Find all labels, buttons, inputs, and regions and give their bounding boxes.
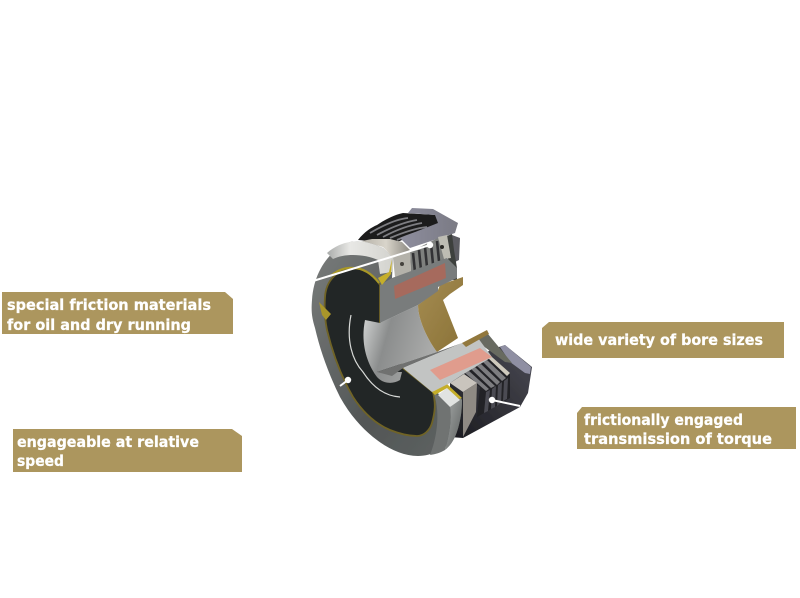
lower gray wedge bbox=[475, 334, 512, 363]
small block top right bbox=[438, 235, 451, 259]
lower light section bbox=[403, 338, 492, 392]
upper casing dark bellows bbox=[358, 213, 440, 243]
bore bbox=[363, 305, 437, 383]
illustration: cutaway clutch bbox=[312, 208, 532, 456]
yellow ring highlight bbox=[332, 268, 379, 283]
upper brown friction lining bbox=[394, 263, 446, 299]
callout: wide variety of bore sizes bbox=[542, 322, 784, 358]
armature plate bbox=[447, 234, 457, 280]
leader line: frictionally engaged bbox=[489, 397, 520, 406]
lower rim inner band bbox=[430, 394, 451, 455]
callout: frictionally engaged transmission of torque bbox=[577, 407, 796, 449]
top rim highlight bbox=[327, 241, 393, 274]
lower actuator shell bbox=[450, 345, 532, 438]
callout: frictionally engaged transmission of torque: transmission of torque bbox=[584, 430, 772, 448]
callout: engageable at relative speed: engageable at relative bbox=[17, 433, 199, 451]
yellow ring and dark face bbox=[325, 268, 435, 436]
callout: wide variety of bore sizes: wide variety of bore sizes bbox=[555, 331, 763, 349]
keyway pin bbox=[319, 302, 331, 320]
top bolt block bbox=[393, 250, 411, 277]
callout: special friction materials bbox=[2, 292, 233, 334]
callout: frictionally engaged transmission of torque: frictionally engaged bbox=[584, 411, 743, 429]
lower block side bbox=[463, 383, 477, 437]
lower tan strip bbox=[462, 330, 489, 347]
upper right armature bbox=[451, 235, 460, 262]
callout: engageable at relative speed bbox=[13, 429, 242, 472]
lower pink friction lining bbox=[430, 348, 492, 380]
cream cylinder bbox=[362, 239, 410, 258]
lower spring bellows bbox=[462, 357, 510, 417]
yellow insert upper bbox=[378, 259, 392, 285]
upper casing bbox=[400, 208, 458, 248]
disc rim bbox=[312, 241, 462, 456]
callout: special friction materials: for oil and dry running bbox=[7, 316, 191, 334]
lower cut rim face bbox=[445, 398, 462, 450]
lower armature ring bbox=[500, 345, 531, 374]
leader line: special friction materials bbox=[313, 242, 433, 281]
callout: special friction materials: special friction materials bbox=[7, 296, 211, 314]
callout: engageable at relative speed: speed bbox=[17, 452, 64, 470]
recess highlight curve bbox=[349, 315, 400, 397]
bore shelf bbox=[377, 343, 462, 376]
lower bolt block bbox=[450, 374, 477, 392]
tan hub cut bbox=[418, 277, 463, 352]
fin section bbox=[410, 238, 448, 276]
upper spring fins bbox=[370, 218, 430, 240]
upper cut section bbox=[380, 258, 457, 323]
yellow insert lower bbox=[432, 384, 462, 399]
lower rim highlight bbox=[438, 387, 460, 407]
leader line: engageable at relative speed bbox=[340, 377, 351, 386]
